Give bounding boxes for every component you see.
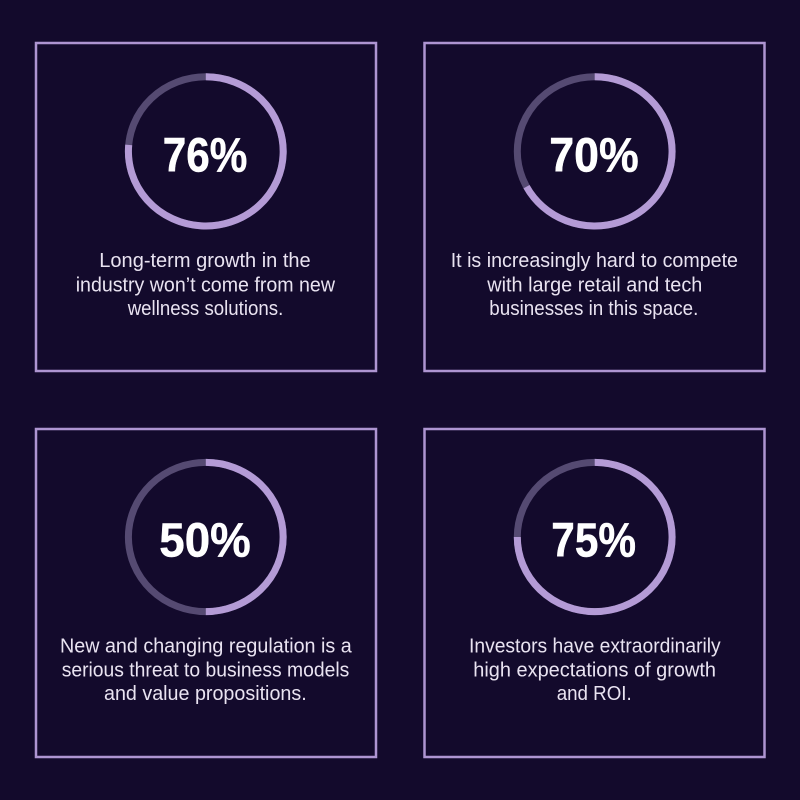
panel frame: [36, 429, 376, 757]
description text: with large retail and tech: [486, 274, 702, 296]
stat: 76%: 76%: [163, 130, 247, 183]
description text: [76, 250, 336, 320]
description text: [469, 635, 721, 705]
donut chart: 75%: [517, 462, 672, 612]
description text: and value propositions.: [104, 683, 307, 705]
description text: New and changing regulation is a: [60, 635, 353, 657]
donut chart: 50%: [128, 462, 283, 612]
description text: high expectations of growth: [473, 660, 716, 682]
donut chart: 70%: [517, 77, 672, 226]
description text: Investors have extraordinarily: [469, 635, 721, 657]
description text: It is increasingly hard to compete: [451, 250, 738, 272]
donut chart: 76%: [128, 77, 283, 226]
panel: 70% competition: [424, 43, 764, 371]
description text: industry won’t come from new: [76, 274, 336, 296]
panel: 50% regulation: [36, 429, 376, 757]
panel: 75% investors: [424, 429, 764, 757]
description text: [451, 250, 738, 320]
panel frame: [424, 43, 764, 371]
description text: [60, 635, 353, 705]
description text: Long-term growth in the: [99, 250, 311, 272]
panel: 76% long-term growth: [36, 43, 376, 371]
description text: wellness solutions.: [127, 298, 283, 320]
description text: and ROI.: [557, 683, 632, 705]
description text: businesses in this space.: [489, 298, 698, 320]
stat: 75%: 75%: [551, 515, 636, 568]
stat: 50%: 50%: [159, 515, 251, 568]
panel frame: [36, 43, 376, 371]
stat: 70%: 70%: [549, 130, 639, 183]
description text: serious threat to business models: [62, 660, 349, 682]
panel frame: [424, 429, 764, 757]
